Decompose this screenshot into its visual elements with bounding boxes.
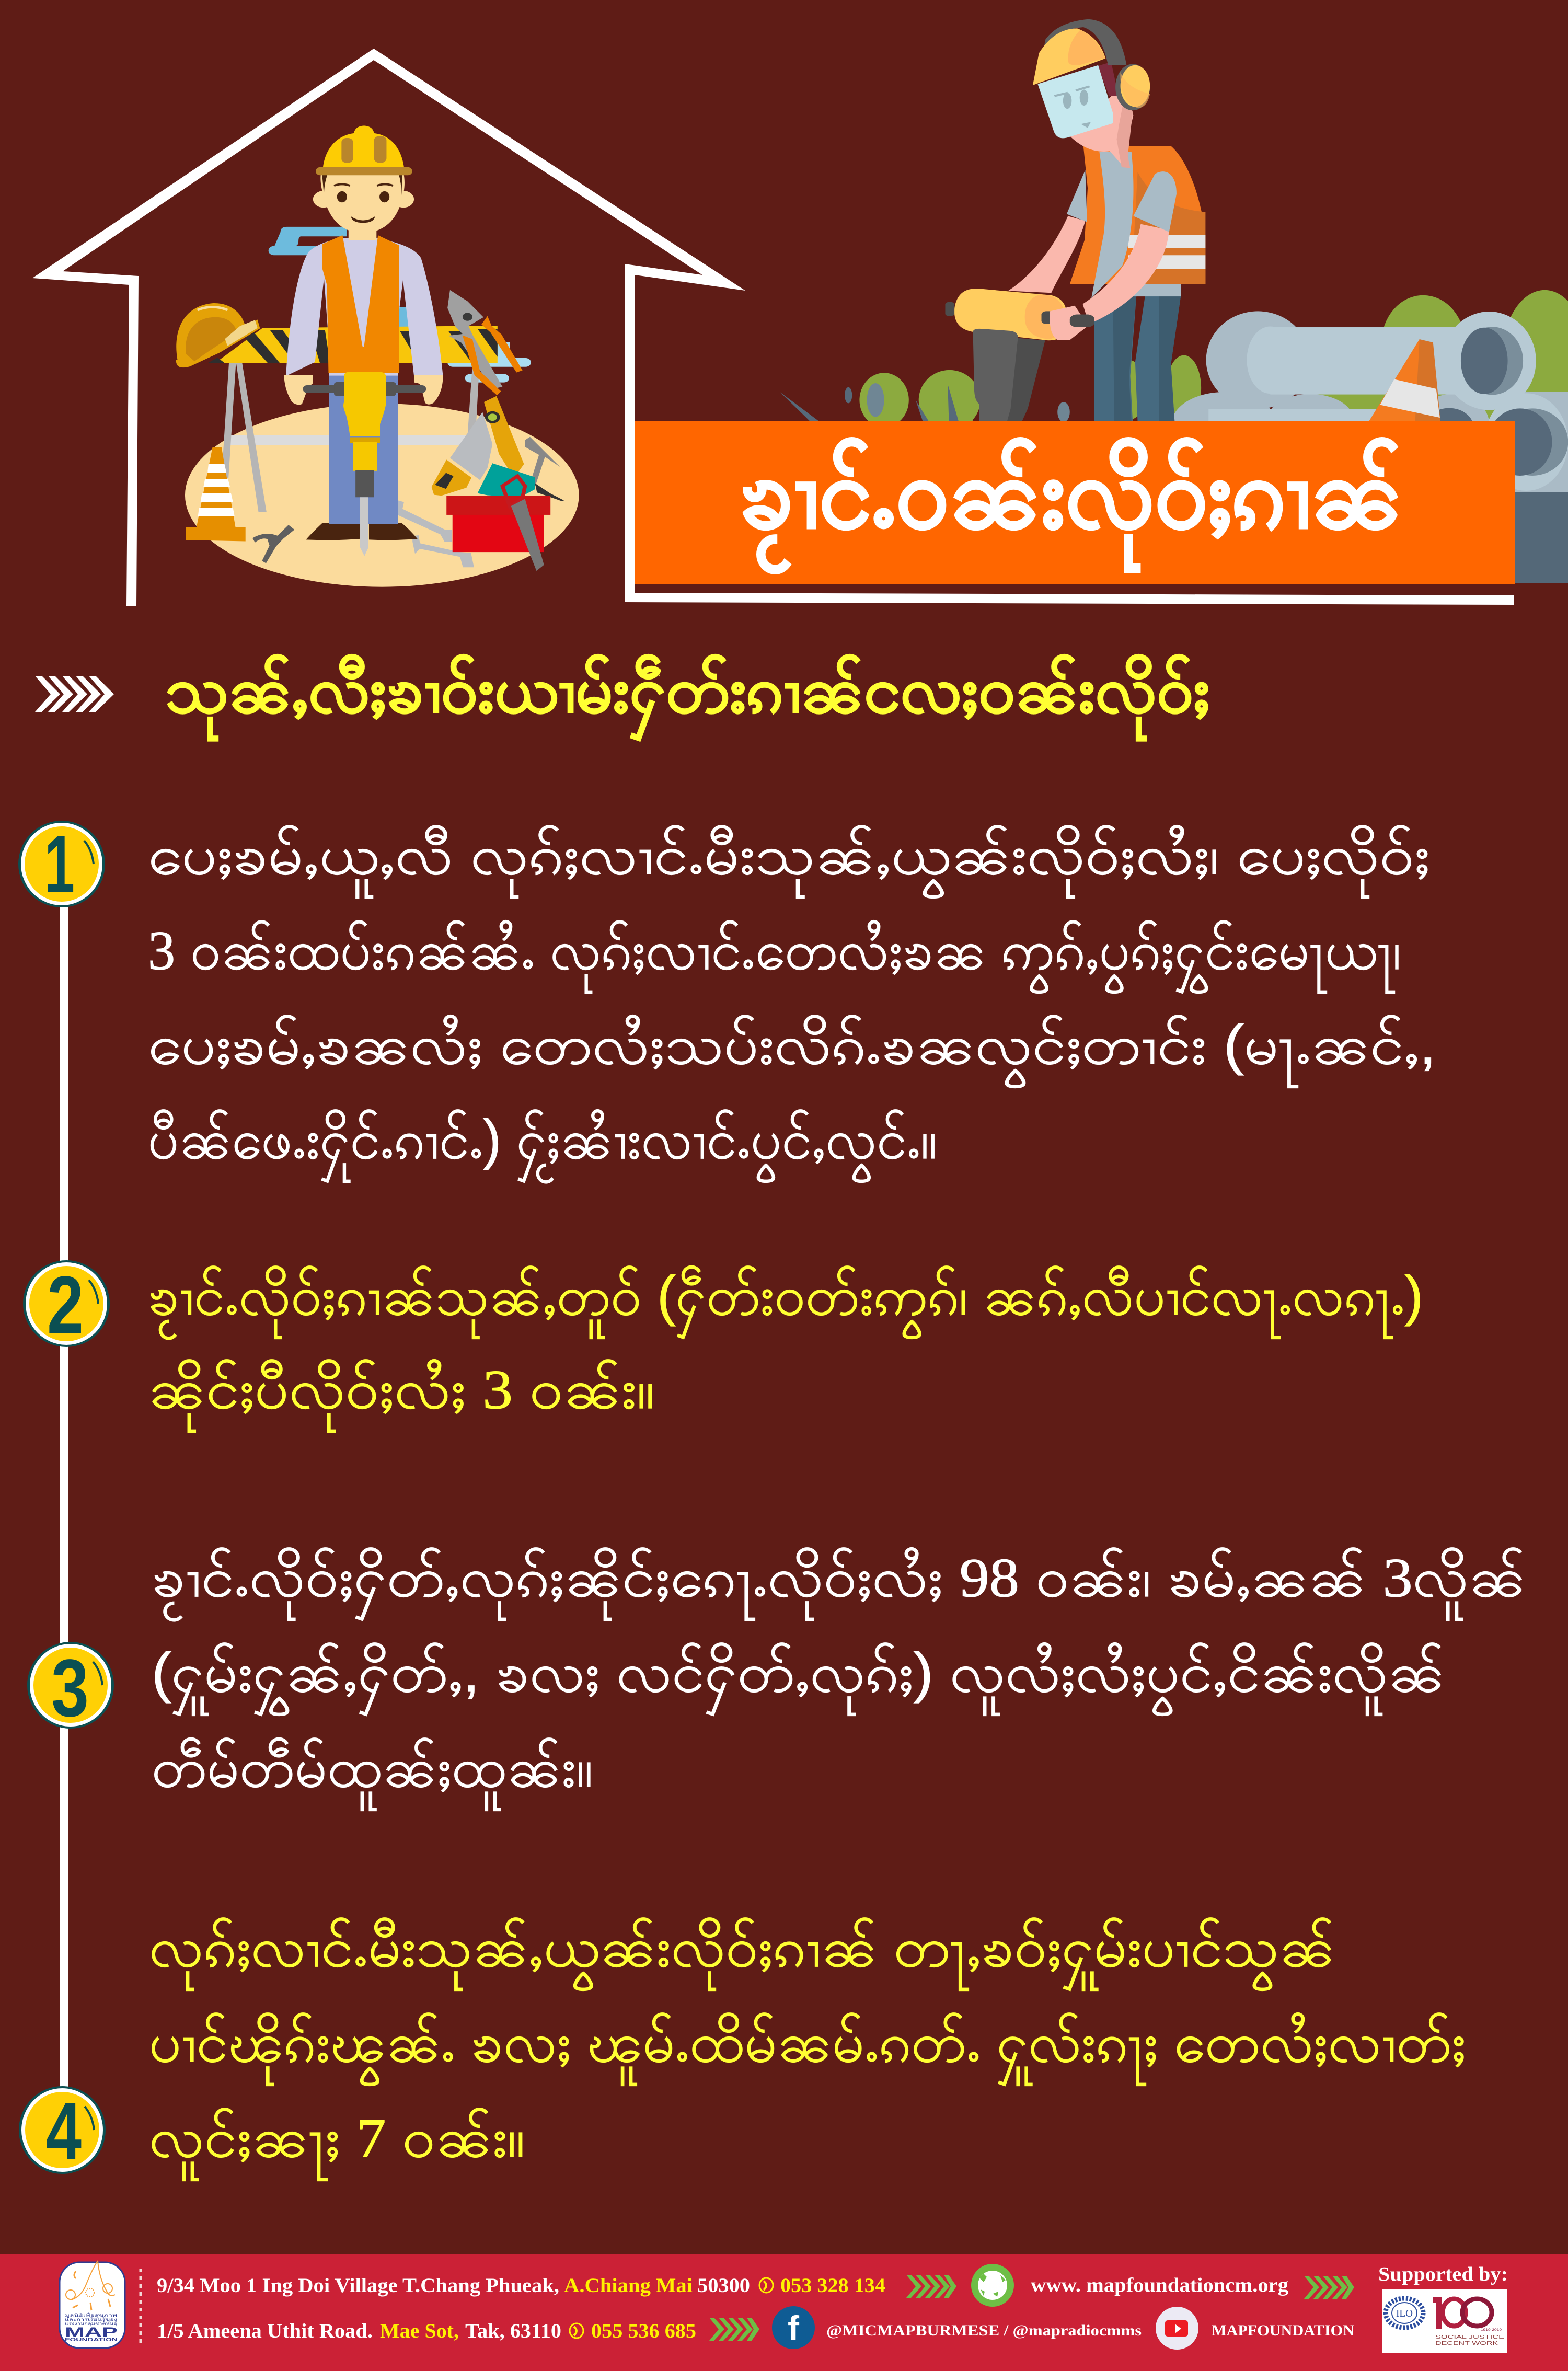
icon: facebook xyxy=(772,2306,815,2349)
item 1 text xyxy=(148,824,1436,1184)
item 2 text: ၼိုင်ႈပီလိုဝ်ႈလႆႈ 3 ဝၼ်း။ xyxy=(148,1359,655,1433)
badge 3: 3 xyxy=(51,1643,89,1734)
item 2 text xyxy=(148,1265,1423,1433)
icon: chevrons xyxy=(709,2318,759,2341)
illustration: worker with ear protection, pipes and plants xyxy=(780,19,1568,583)
item 1 text: 3 ဝၼ်းထပ်းၵၼ်ၼႆႉ လုၵ်ႈလၢင်ႉတေလႆႈၶၼ ဢွၵ်ႇပွၵ်ႈႁွင်းမေႃယႃ၊ xyxy=(148,919,1401,994)
logo: ILO 100: SOCIAL JUSTICE xyxy=(1435,2334,1505,2340)
item 3 text: ၶႂၢင်ႉလိုဝ်ႈႁိတ်ႇလုၵ်ႈၼိုင်ႈၵေႃႉလိုဝ်ႈလႆႈ 98 ဝၼ်း၊ ၶမ်ႇၼၼ် 3လိူၼ် xyxy=(152,1547,1526,1622)
logo: ILO 100 xyxy=(1382,2289,1507,2353)
logo: MAP Foundation: FOUNDATION xyxy=(65,2337,118,2342)
item 3 text xyxy=(152,1547,1526,1811)
badge 4: 4 xyxy=(46,2086,82,2177)
logo: ILO 100: DECENT WORK xyxy=(1435,2341,1498,2346)
item 1 text: ပေႈၶမ်ႇၶၼလႆႈ တေလႆႈသပ်းလိၵ်ႉၶၼလွင်ႈတၢင်း (မႃႉၼင်ႇ, xyxy=(148,1014,1436,1088)
badge 1: 1 xyxy=(44,819,75,910)
badge 4 xyxy=(19,2086,106,2177)
item 3 text: တဵမ်တဵမ်ထူၼ်ႈထူၼ်း။ xyxy=(152,1737,593,1811)
icon: globe xyxy=(971,2264,1014,2307)
item 3 text: (ႁူမ်းႁွၼ်ႇႁိတ်ႇ, ၶလႈ လင်ႁိတ်ႇလုၵ်ႈ) လူလႆႈလႆႈပွင်ႇငိၼ်းလိူၼ် xyxy=(152,1642,1445,1716)
heading: သုၼ်ႇလီႈၶၢဝ်းယၢမ်းႁဵတ်းၵၢၼ်ငလႈဝၼ်းလိုဝ်ႈ xyxy=(165,654,1210,742)
address line 2: 1/5 Ameena Uthit Road. xyxy=(157,2320,373,2342)
address line 1: 053 328 134 xyxy=(780,2274,885,2297)
badge 2 xyxy=(23,1260,110,1351)
logo: MAP Foundation: และการเรียนรู้ของ xyxy=(65,2317,117,2322)
badge 3 xyxy=(27,1642,114,1734)
footer xyxy=(0,2254,1568,2371)
icon: chevrons xyxy=(1304,2276,1354,2299)
timeline line xyxy=(60,904,68,2091)
address line 1: A.Chiang Mai xyxy=(564,2274,693,2297)
address line 1: 50300 xyxy=(697,2274,750,2297)
logo: ILO 100: ILO xyxy=(1396,2308,1413,2319)
illustration: worker with jackhammer and tools xyxy=(176,125,579,587)
icon: heading chevrons xyxy=(35,676,114,712)
icon: facebook: f xyxy=(788,2309,800,2347)
house outline xyxy=(32,49,1514,606)
badge 2: 2 xyxy=(47,1260,84,1351)
item 4 text xyxy=(149,1917,1466,2181)
dashed divider xyxy=(139,2269,142,2346)
logo: MAP Foundation: มูลนิธิเพื่อสุขภาพ xyxy=(65,2312,117,2318)
badge 1 xyxy=(18,819,105,910)
website: www. mapfoundationcm.org xyxy=(1031,2274,1288,2296)
icon: youtube xyxy=(1156,2307,1198,2350)
logo: MAP Foundation: MAP xyxy=(65,2325,118,2340)
item 2 text: ၶႂၢင်ႉလိုဝ်ႈၵၢၼ်သုၼ်ႇတူဝ် (ႁဵတ်းဝတ်းဢွၵ်၊ ၼၵ်ႇလီပၢင်လႃႉလၵႃႉ) xyxy=(148,1265,1423,1340)
youtube handle: MAPFOUNDATION xyxy=(1212,2322,1354,2339)
address line 2: Tak, 63110 xyxy=(465,2320,561,2342)
item 1 text: ပေႈၶမ်ႇယူႇလီ လုၵ်ႈလၢင်ႉမီးသုၼ်ႇယွၼ်းလိုဝ်ႈလႆႈ၊ ပေႈလိုဝ်ႈ xyxy=(148,824,1430,899)
address line 2 xyxy=(157,2320,696,2342)
logo: MAP Foundation: แรงงานกลุ่มชาติพันธุ์ xyxy=(65,2321,117,2327)
address line 2: 055 536 685 xyxy=(591,2320,696,2342)
logo: MAP Foundation xyxy=(60,2261,125,2348)
title: ၶႂၢင်ႉဝၼ်းလိုဝ်ႈၵၢၼ် xyxy=(740,438,1403,573)
supported by: Supported by: xyxy=(1378,2263,1508,2285)
icon: chevrons xyxy=(906,2275,956,2298)
item 4 text: လုၵ်ႈလၢင်ႉမီးသုၼ်ႇယွၼ်းလိုဝ်ႈၵၢၼ် တႃႇၶဝ်ႈႁူမ်းပၢင်သွၼ် xyxy=(149,1917,1335,1991)
item 1 text: ပီၼ်ဖေႉးႁိုင်ႉၵၢင်ႉ) ႁႂ်ႈၼၢႆးလၢင်ႉပွင်ႇလွင်ႉ။ xyxy=(148,1109,937,1184)
logo: ILO 100: 1919-2019 xyxy=(1481,2329,1502,2332)
address line 1: 9/34 Moo 1 Ing Doi Village T.Chang Phueak, xyxy=(157,2274,559,2297)
social handles: @MICMAPBURMESE / @mapradiocmms xyxy=(826,2322,1142,2339)
address line 1 xyxy=(157,2274,885,2297)
item 4 text: ပၢင်ၽိုၵ်းၽွၼ်ႉ ၶလႈ ၽူမ်ႉထိမ်ၼမ်ႉၵတ်ႉ ႁူလ်းၵႃႈ တေလႆႈလၢတ်ႈ xyxy=(149,2012,1466,2086)
address line 2: Mae Sot, xyxy=(380,2320,459,2342)
item 4 text: လူင်ႈၼႃႈ 7 ဝၼ်း။ xyxy=(149,2107,525,2181)
title banner xyxy=(635,421,1568,584)
